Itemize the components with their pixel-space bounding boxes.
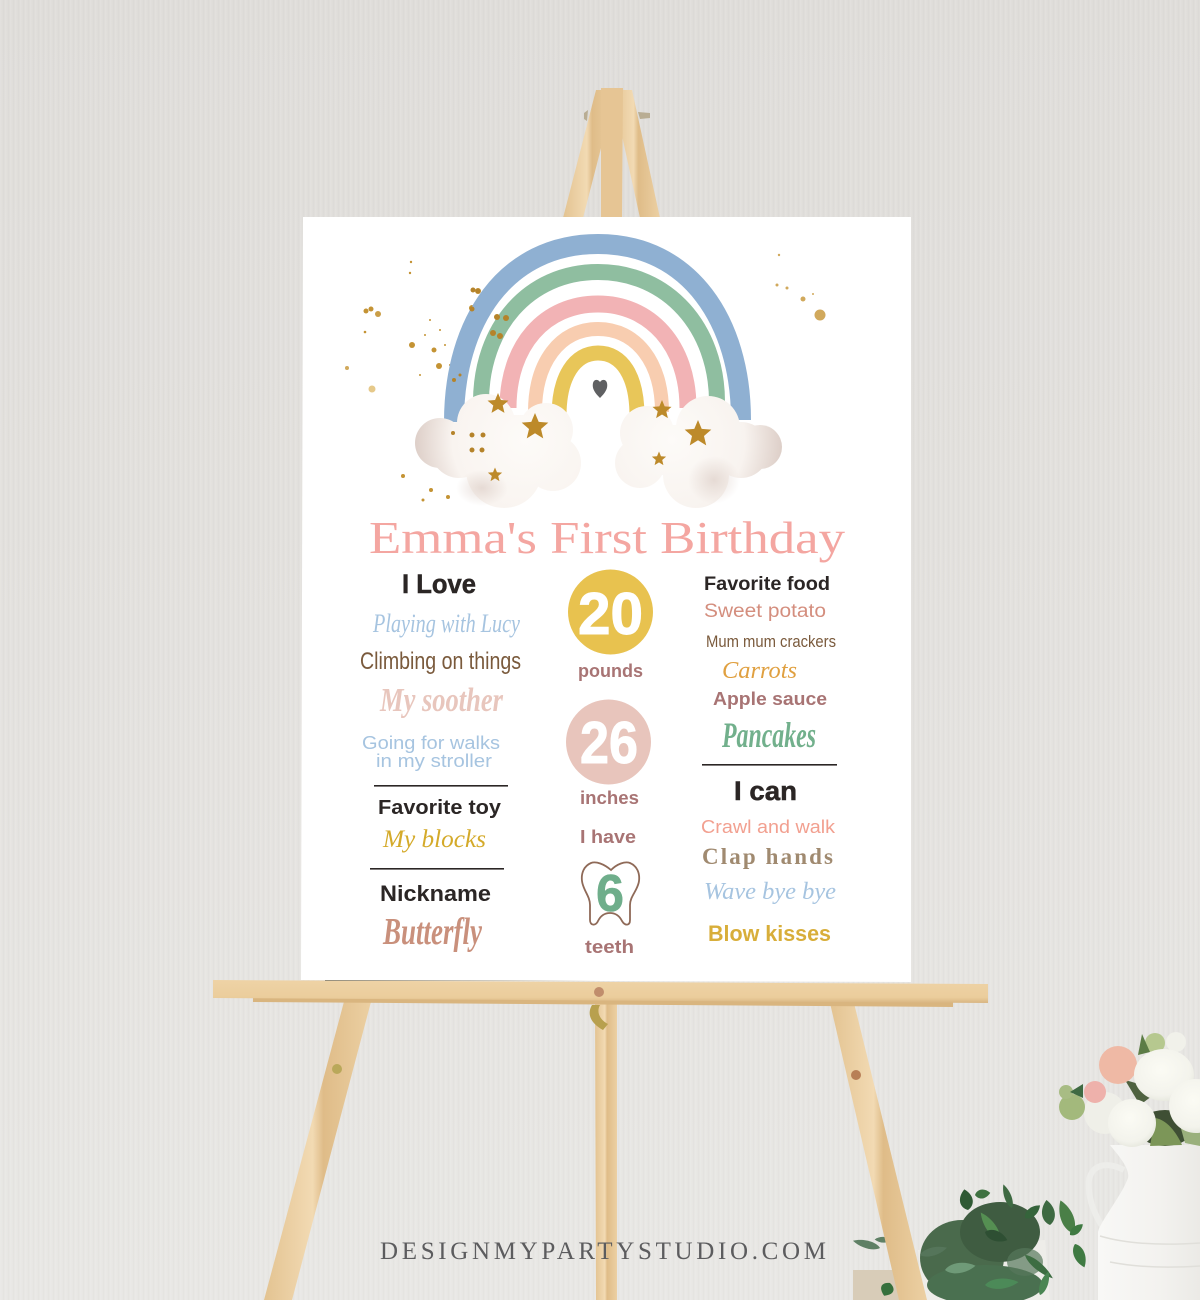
gold stars [488, 393, 711, 481]
pink arc [508, 304, 688, 408]
gold splatter [345, 254, 826, 502]
right top leg [612, 90, 660, 218]
item: Carrots: Carrots [722, 658, 797, 684]
left cloud [415, 394, 581, 508]
flower jug [1059, 1032, 1200, 1300]
item: Climbing on things: Climbing on things [360, 648, 521, 675]
green arc [481, 272, 717, 402]
item: Butterfly: Butterfly [382, 911, 482, 953]
label: I have: I have [580, 827, 636, 847]
left top leg [563, 90, 616, 218]
item: in my stroller: in my stroller [376, 751, 492, 771]
label: pounds: pounds [578, 661, 643, 681]
right lower leg [830, 1003, 927, 1300]
heading: Nickname: Nickname [380, 881, 491, 906]
item: Mum mum crackers: Mum mum crackers [706, 632, 836, 651]
height badge [566, 700, 651, 784]
gold flecks on rainbow [452, 288, 509, 382]
plant pot [918, 1240, 1050, 1300]
weight badge [568, 570, 653, 654]
item: My soother: My soother [379, 682, 504, 719]
heading: Favorite toy: Favorite toy [378, 797, 502, 819]
blue arc [454, 244, 741, 422]
rainbow [454, 244, 741, 422]
easel top legs [563, 88, 660, 218]
left screw [332, 1064, 342, 1074]
easel ledge [213, 979, 988, 1007]
item: My blocks: My blocks [382, 826, 486, 853]
centre lower leg [595, 1000, 617, 1300]
left lower leg [264, 998, 372, 1300]
jug rim lines [1100, 1236, 1200, 1267]
item: Pancakes: Pancakes [721, 715, 816, 755]
poster board [301, 217, 911, 982]
jug handle [1089, 1165, 1124, 1226]
item: Playing with Lucy: Playing with Lucy [372, 609, 520, 638]
icon: tooth with count: 6 [596, 865, 624, 923]
item: Blow kisses: Blow kisses [708, 921, 831, 946]
item: Wave bye bye: Wave bye bye [704, 879, 836, 905]
icon: grey heart [593, 380, 607, 398]
heading: I Love: I Love [402, 569, 476, 599]
label: teeth: teeth [585, 937, 634, 957]
jug body [1098, 1145, 1200, 1300]
gold flecks on left cloud [451, 431, 486, 452]
beige box behind plant [853, 1270, 901, 1300]
right cloud [615, 396, 782, 508]
yellow arc [559, 353, 637, 416]
item: Crawl and walk: Crawl and walk [701, 817, 836, 837]
watermark: DESIGNMYPARTYSTUDIO.COM [380, 1238, 826, 1265]
plant foliage [852, 1183, 1089, 1300]
centre clasp [590, 1005, 608, 1030]
top bolts [584, 110, 650, 121]
right screw [851, 1070, 861, 1080]
weight badge: 20 [578, 581, 643, 647]
centre top post [601, 88, 623, 218]
label: inches: inches [580, 788, 639, 808]
height badge: 26 [580, 710, 638, 776]
title: Emma's First Birthday [369, 512, 845, 563]
item: Clap hands: Clap hands [702, 844, 833, 869]
potted plant [852, 1183, 1089, 1300]
item: Sweet potato: Sweet potato [704, 601, 826, 622]
bouquet [1059, 1032, 1200, 1147]
item: Apple sauce: Apple sauce [713, 689, 827, 709]
right column [701, 574, 837, 946]
heading: Favorite food: Favorite food [704, 574, 830, 595]
item: Going for walks: Going for walks [362, 733, 500, 753]
icon: tooth with count [582, 862, 639, 925]
heading: I can: I can [734, 776, 797, 806]
left column [360, 569, 521, 953]
centre column [566, 570, 653, 957]
peach arc [535, 329, 662, 412]
easel lower legs [264, 998, 927, 1300]
